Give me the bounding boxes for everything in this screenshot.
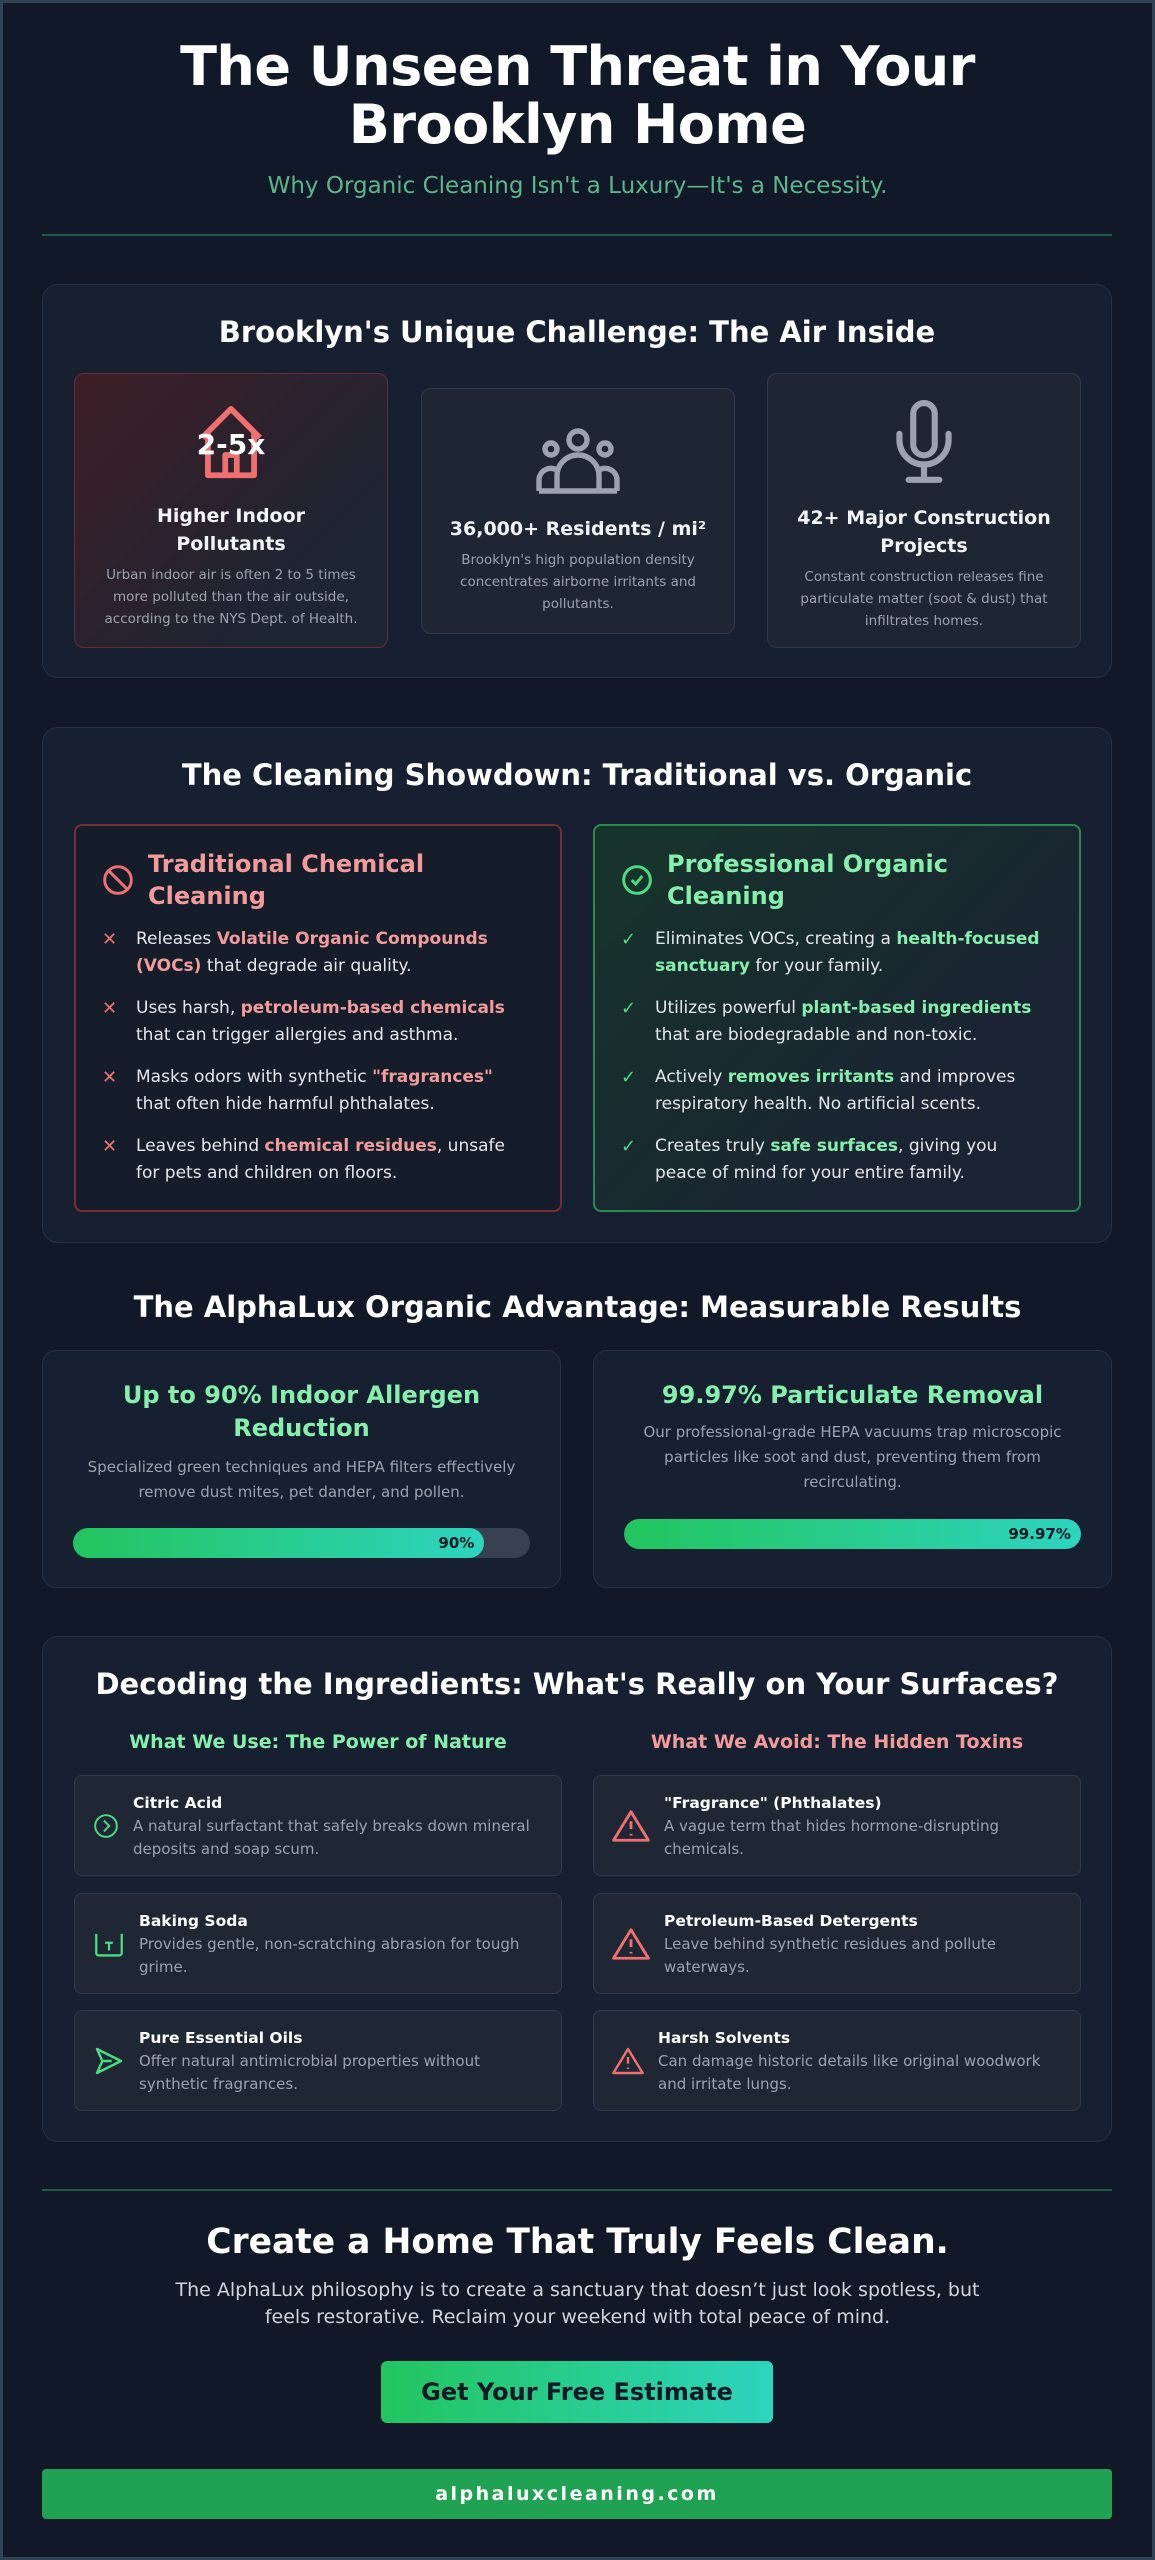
item: harsh solvents: Can damage historic details like original woodwork and irritate lungs. [658,2052,1040,2092]
panel: traditional chemical cleaning [74,824,562,1212]
item: petroleum detergents: Petroleum-Based Detergents [664,1912,918,1930]
card: higher indoor pollutants [74,373,388,648]
card: allergen reduction: Reduction [233,1414,370,1442]
card: higher indoor pollutants: Higher Indoor [157,505,305,527]
list: organic benefits [621,929,1040,1183]
title [180,35,976,156]
item: harsh solvents [593,2010,1081,2111]
item: petroleum detergents [593,1893,1081,1994]
list: organic benefits: ✓ [621,998,636,1019]
text: philosophy: The AlphaLux philosophy is to create a sanctuary that doesn’t just look spotless, but [176,2279,979,2301]
list: traditional drawbacks: ✕ [102,998,117,1019]
item: baking soda: Provides gentle, non-scratching abrasion for tough grime. [139,1934,519,1976]
heading: organic: Professional Organic [667,850,948,878]
card: residents density: 36,000+ Residents / mi² [450,518,706,540]
bar chart: 90%: 90% [438,1534,474,1552]
heading: organic [622,850,948,910]
heading: measurable results: The AlphaLux Organic Advantage: Measurable Results [134,1290,1021,1324]
card: allergen reduction: Specialized green techniques and HEPA filters effectively remove dust mites, pet dander, and pollen. [88,1458,515,1501]
icon: house: 2-5x [197,428,265,461]
text: philosophy: feels restorative. Reclaim your weekend with total peace of mind. [265,2306,890,2328]
card: higher indoor pollutants: Pollutants [176,533,286,555]
item: baking soda [74,1893,562,1994]
panel: Brooklyn's unique challenge [42,284,1112,678]
item: fragrance: "Fragrance" (Phthalates) [664,1794,882,1812]
bar chart: 90% [73,1528,530,1558]
card: particulate removal [593,1350,1112,1588]
card: particulate removal: Our professional-grade HEPA vacuums trap microscopic particles like soot and dust, preventing them from recirculating. [643,1423,1062,1491]
list: traditional drawbacks: ✕ [102,1067,117,1088]
footer: website: alphaluxcleaning.com [435,2483,719,2505]
list: organic benefits: Actively removes irritants and improves respiratory health. No artificial scents. [655,1067,1015,1114]
icon: microphone [896,400,952,483]
heading: challenge: Brooklyn's Unique Challenge: The Air Inside [219,315,935,349]
list: organic benefits: ✓ [621,929,636,950]
card: residents density [421,388,735,634]
item: essential oils: Offer natural antimicrobial properties without synthetic fragrances. [139,2052,480,2092]
heading: ingredients: Decoding the Ingredients: What's Really on Your Surfaces? [95,1667,1058,1701]
item: citric acid [74,1775,562,1876]
icon: house [197,406,265,478]
item: baking soda: Baking Soda [139,1912,248,1930]
card: allergen reduction [42,1350,561,1588]
card: construction projects [767,373,1081,648]
bar chart: 99.97%: 99.97% [1008,1525,1071,1543]
panel: decoding ingredients [42,1636,1112,2142]
heading: what we use: What We Use: The Power of Nature [129,1731,507,1753]
list: traditional drawbacks: Masks odors with synthetic "fragrances" that often hide harmful phthalates. [136,1067,493,1114]
heading: organic: Cleaning [667,882,785,910]
heading: showdown: The Cleaning Showdown: Traditional vs. Organic [182,758,972,792]
list: traditional drawbacks: Uses harsh, petroleum-based chemicals that can trigger allergies and asthma. [136,998,505,1045]
heading: what we avoid: What We Avoid: The Hidden Toxins [651,1731,1023,1753]
list: organic benefits: ✓ [621,1136,636,1157]
item: citric acid: A natural surfactant that safely breaks down mineral deposits and soap scum. [133,1816,530,1858]
card: particulate removal: 99.97% Particulate Removal [662,1381,1043,1409]
list: traditional drawbacks: ✕ [102,1136,117,1157]
text: philosophy [175,2279,979,2328]
card: allergen reduction: Up to 90% Indoor Allergen [123,1381,480,1409]
list: traditional drawbacks [102,929,505,1183]
list: organic benefits: ✓ [621,1067,636,1088]
icon: people [536,428,620,494]
title: The Unseen Threat in Your [180,35,975,98]
card: construction projects: Projects [880,535,968,557]
heading: call to action: Create a Home That Truly Feels Clean. [206,2222,949,2262]
footer: website [42,2469,1112,2519]
card: higher indoor pollutants: Urban indoor air is often 2 to 5 times more polluted than the air outside, according to the NYS Dept. of Health. [104,567,358,627]
item: essential oils: Pure Essential Oils [139,2028,302,2046]
list: organic benefits: Creates truly safe surfaces, giving you peace of mind for your entire family. [655,1136,997,1183]
item: harsh solvents: Harsh Solvents [658,2028,790,2046]
list: traditional drawbacks: Leaves behind chemical residues, unsafe for pets and children on floors. [136,1136,505,1183]
item: petroleum detergents: Leave behind synthetic residues and pollute waterways. [664,1934,996,1976]
item: essential oils [74,2010,562,2111]
list: traditional drawbacks: Releases Volatile Organic Compounds (VOCs) that degrade air quality. [136,929,488,976]
item: fragrance [593,1775,1081,1876]
heading: traditional [103,850,424,910]
bar chart: 99.97% [624,1519,1081,1549]
list: organic benefits: Eliminates VOCs, creating a health-focused sanctuary for your family. [655,929,1040,976]
card: construction projects: 42+ Major Construction [797,507,1051,529]
button: free estimate [381,2361,773,2423]
button: free estimate: Get Your Free Estimate [421,2378,733,2406]
card: residents density: Brooklyn's high population density concentrates airborne irritants and pollutants. [460,552,696,612]
item: fragrance: A vague term that hides hormone-disrupting chemicals. [664,1816,999,1858]
title: Brooklyn Home [349,93,806,156]
heading: traditional: Cleaning [148,882,266,910]
list: organic benefits: Utilizes powerful plant-based ingredients that are biodegradable and non-toxic. [655,998,1031,1045]
list: traditional drawbacks: ✕ [102,929,117,950]
item: citric acid: Citric Acid [133,1794,222,1812]
panel: professional organic cleaning [593,824,1081,1212]
card: construction projects: Constant construction releases fine particulate matter (soot & dust) that infiltrates homes. [800,569,1048,629]
panel: cleaning showdown [42,727,1112,1243]
subtitle: Why Organic Cleaning Isn't a Luxury—It's a Necessity. [268,173,887,199]
heading: traditional: Traditional Chemical [148,850,424,878]
